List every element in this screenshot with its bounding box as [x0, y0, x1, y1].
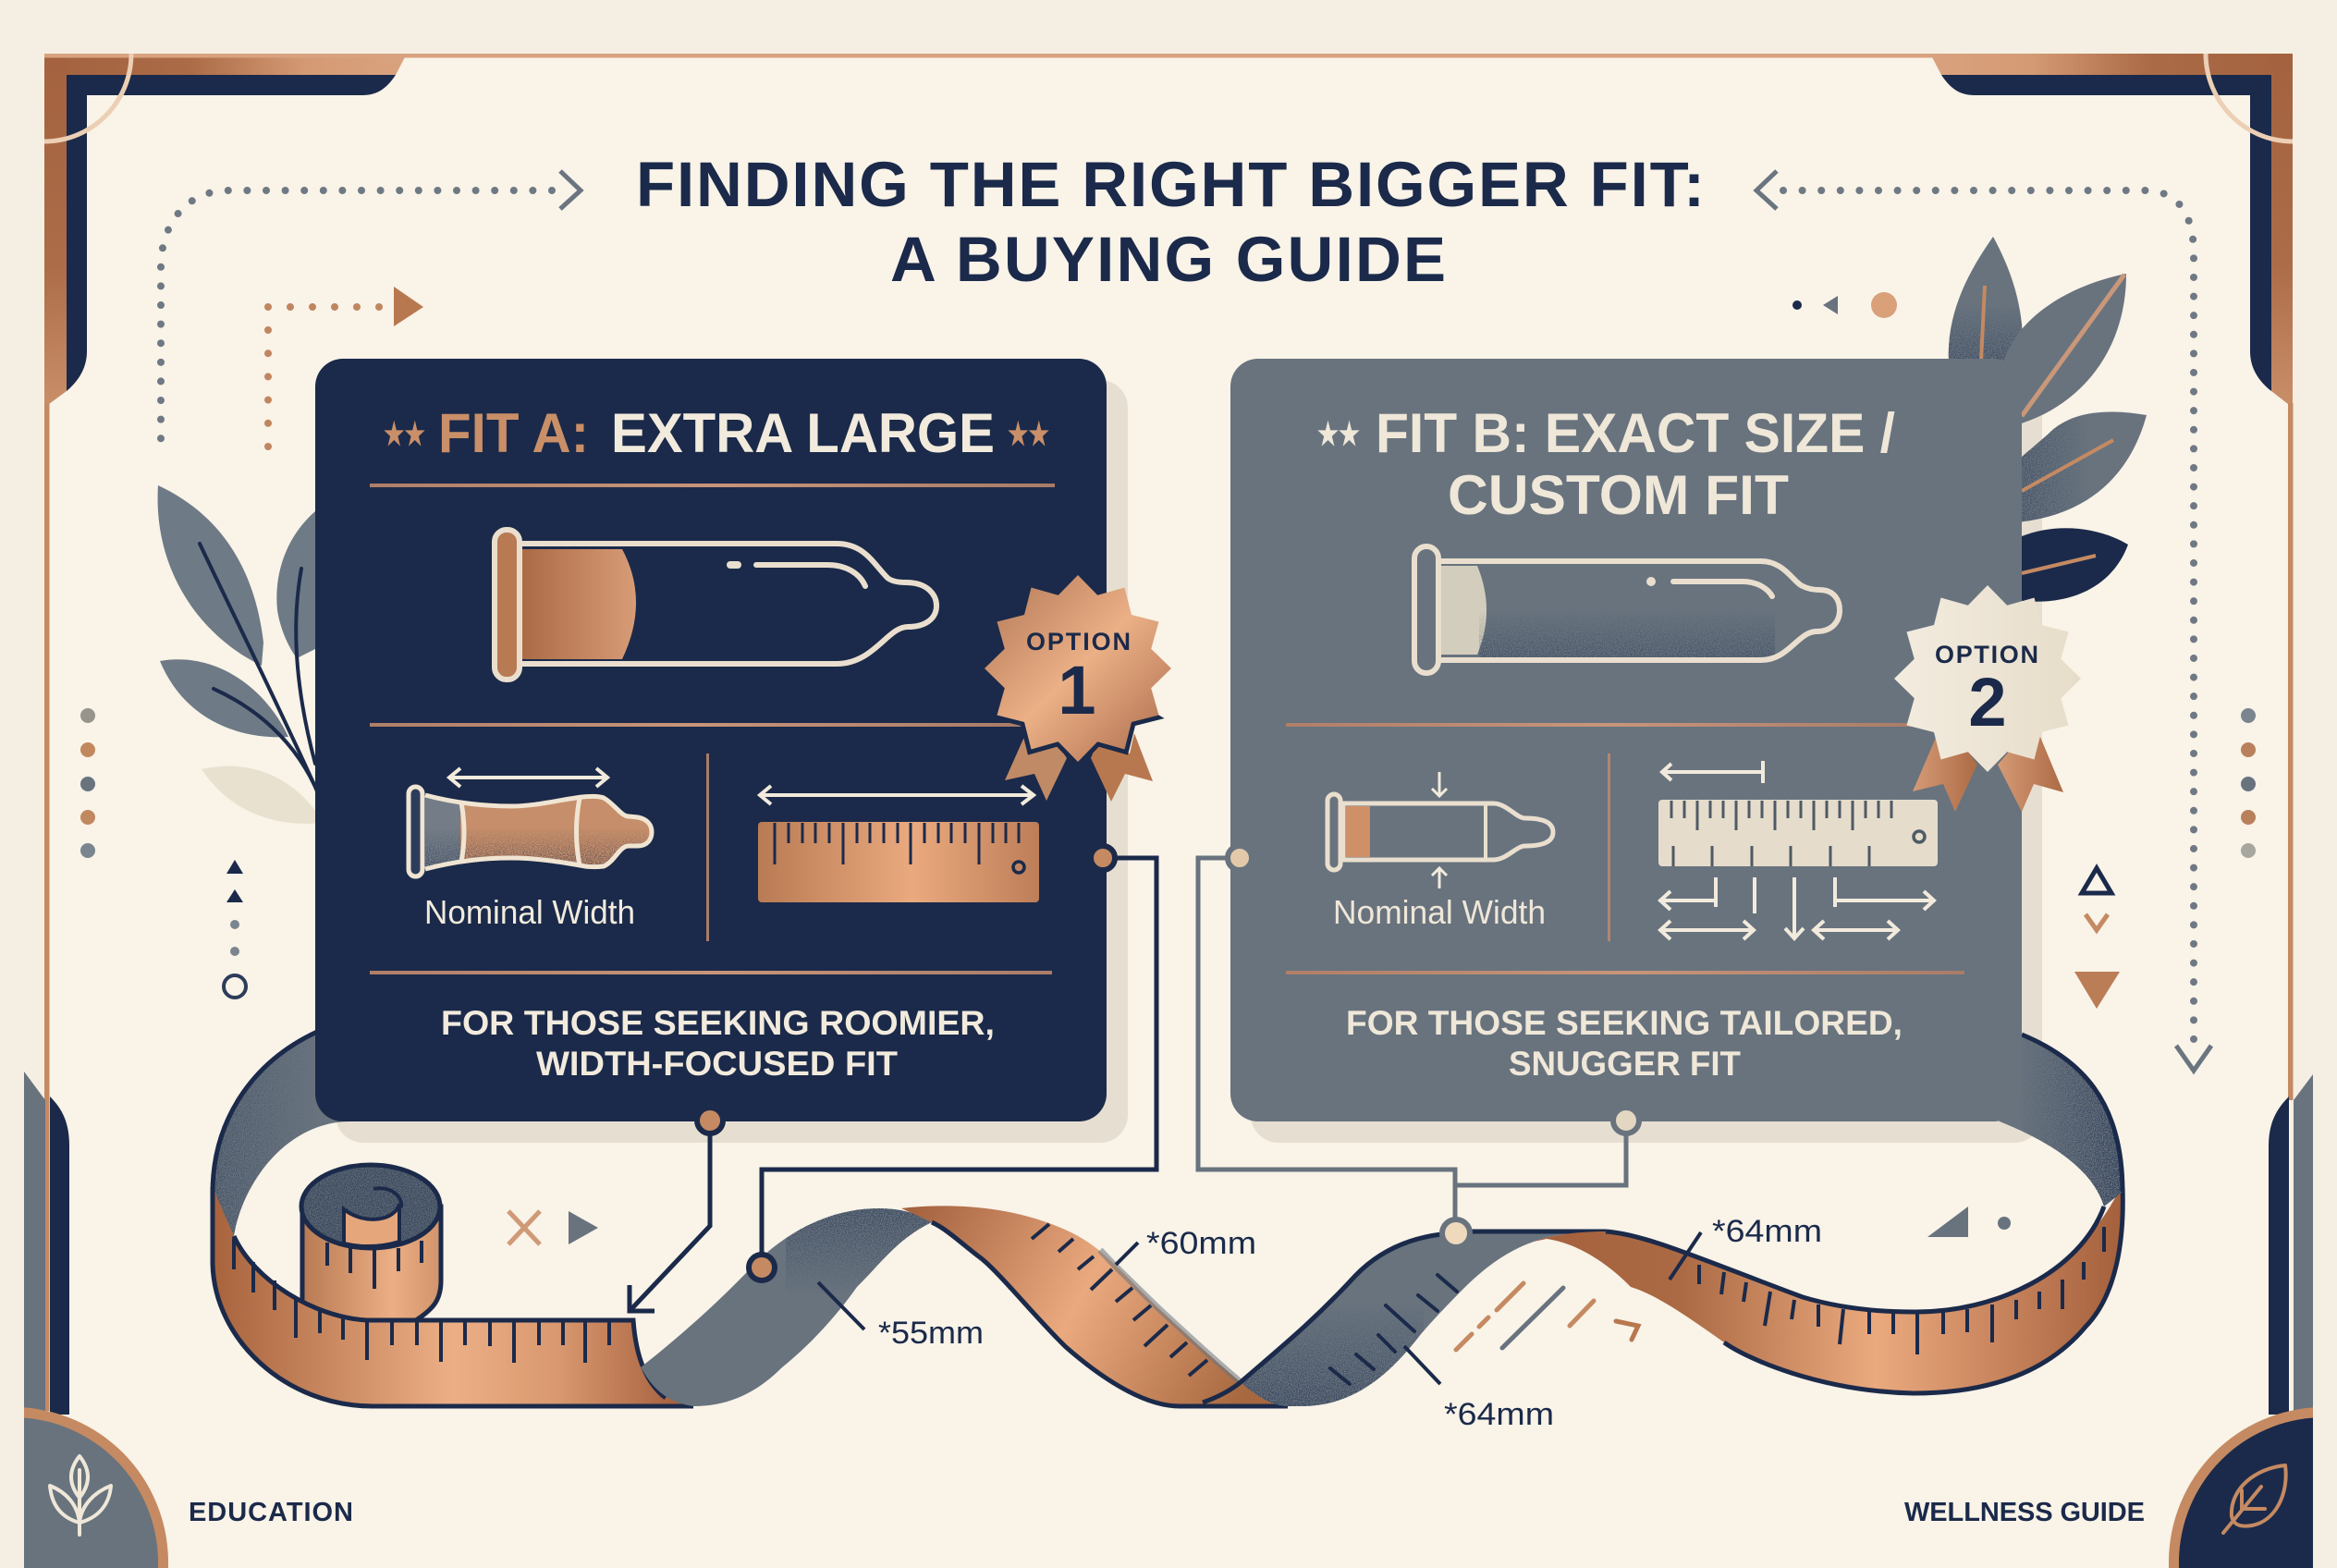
heading: fit B: CUSTOM FIT [1448, 464, 1789, 526]
decor: left dots [80, 708, 95, 858]
tape: left loop slate [211, 1030, 349, 1236]
label: 64mm bottom [1404, 1346, 1554, 1432]
title [636, 149, 1705, 295]
panel: fit B [1230, 359, 2022, 1121]
heading: fit B: FIT B: EXACT SIZE / [1376, 402, 1895, 464]
label: 64mm top: *64mm [1712, 1214, 1822, 1249]
divider [1608, 753, 1610, 941]
frame: left edge line [44, 403, 50, 1411]
label: 64mm bottom: *64mm [1444, 1397, 1554, 1432]
text: fit B description: FOR THOSE SEEKING TAILORED, [1346, 1004, 1903, 1042]
dotted arrow: copper [268, 287, 423, 453]
frame: bottom right corner [2169, 1074, 2313, 1568]
tape: third segment copper [901, 1206, 1288, 1406]
frame: top left corner [44, 54, 2293, 407]
decor: left triangles and ring [224, 860, 246, 998]
leaves: left [158, 485, 324, 824]
label: 60mm: *60mm [1146, 1226, 1256, 1261]
connector: fit A to tape dot [749, 846, 1156, 1280]
badge: option 2: 2 [1968, 664, 2007, 741]
divider [1286, 971, 1964, 974]
badge: option 2: OPTION [1935, 641, 2038, 668]
tape: second segment slate [641, 1202, 934, 1406]
badge: option 2 [1894, 585, 2081, 812]
icon: large shape, copper fill [495, 530, 936, 680]
decor: dashes [1456, 1283, 1638, 1350]
heading: fit A: ★★ [384, 417, 425, 452]
text: fit A description: WIDTH-FOCUSED FIT [536, 1045, 898, 1083]
tape: left loop copper [213, 1187, 693, 1406]
frame: top right corner [1930, 54, 2293, 407]
heading: fit B [1317, 402, 1895, 526]
dotted arrow: top left [161, 171, 581, 446]
icon: copper ruler [758, 786, 1039, 902]
badge: option 1 [985, 575, 1171, 802]
label: 64mm top [1670, 1214, 1822, 1280]
badge: option 1: OPTION [1026, 628, 1131, 655]
label: nominal width: Nominal Width [1333, 893, 1546, 931]
decor: right dots [2241, 708, 2256, 858]
label: 55mm: *55mm [878, 1316, 984, 1351]
text: fit B description [1346, 1004, 1903, 1083]
decor: right triangles [2074, 868, 2120, 1009]
decor: top right marks [1793, 292, 1897, 318]
icon: small shape with width arrow [409, 768, 652, 876]
icon: large shape, beige fill [1414, 546, 1840, 673]
text: fit A description: FOR THOSE SEEKING ROOMIER, [441, 1004, 995, 1042]
tape: roll [301, 1165, 441, 1331]
heading: fit B: ★★ [1317, 417, 1360, 452]
connector: fit A to tape arrow [630, 1108, 723, 1311]
dotted arrow: top right [1756, 171, 2211, 1071]
icon: small shape with arrows [1328, 772, 1553, 888]
decor: cross and triangle [508, 1211, 598, 1244]
badge: option 1: 1 [1058, 652, 1096, 729]
divider [706, 753, 709, 941]
footer label: wellness guide: WELLNESS GUIDE [1904, 1498, 2145, 1527]
title: FINDING THE RIGHT BIGGER FIT: [636, 149, 1705, 220]
frame: right edge line [2288, 403, 2293, 1100]
heading: fit A: ★★ [1008, 417, 1049, 452]
footer label: education: EDUCATION [189, 1498, 353, 1527]
text: fit B description: SNUGGER FIT [1509, 1045, 1741, 1083]
decor: right triangle and dot [1927, 1207, 2011, 1237]
title: A BUYING GUIDE [890, 224, 1446, 295]
tape: fourth segment slate [1203, 1231, 1606, 1407]
tape: fifth segment copper [1534, 1187, 2123, 1393]
icon: plant [50, 1456, 111, 1535]
connector: fit B side [1198, 846, 1639, 1247]
divider [1286, 723, 1924, 727]
divider [370, 971, 1052, 974]
heading: fit A: FIT A: [438, 402, 589, 464]
icon: beige ruler with arrows [1658, 761, 1938, 939]
measuring tape [211, 1017, 2124, 1407]
leaves: right [1946, 237, 2147, 602]
divider [370, 484, 1055, 487]
label: 55mm [818, 1282, 984, 1351]
text: fit A description [441, 1004, 995, 1083]
panel: fit A [315, 359, 1107, 1121]
divider [370, 723, 1022, 727]
tape: right loop [1988, 1031, 2124, 1208]
heading: fit A [384, 402, 1049, 464]
label: 60mm [1116, 1226, 1256, 1265]
panel shadows [336, 380, 2042, 1143]
label: nominal width: Nominal Width [424, 893, 635, 931]
heading: fit A: EXTRA LARGE [611, 402, 995, 464]
frame: bottom left corner [24, 1072, 168, 1568]
icon: leaf [2223, 1465, 2286, 1533]
